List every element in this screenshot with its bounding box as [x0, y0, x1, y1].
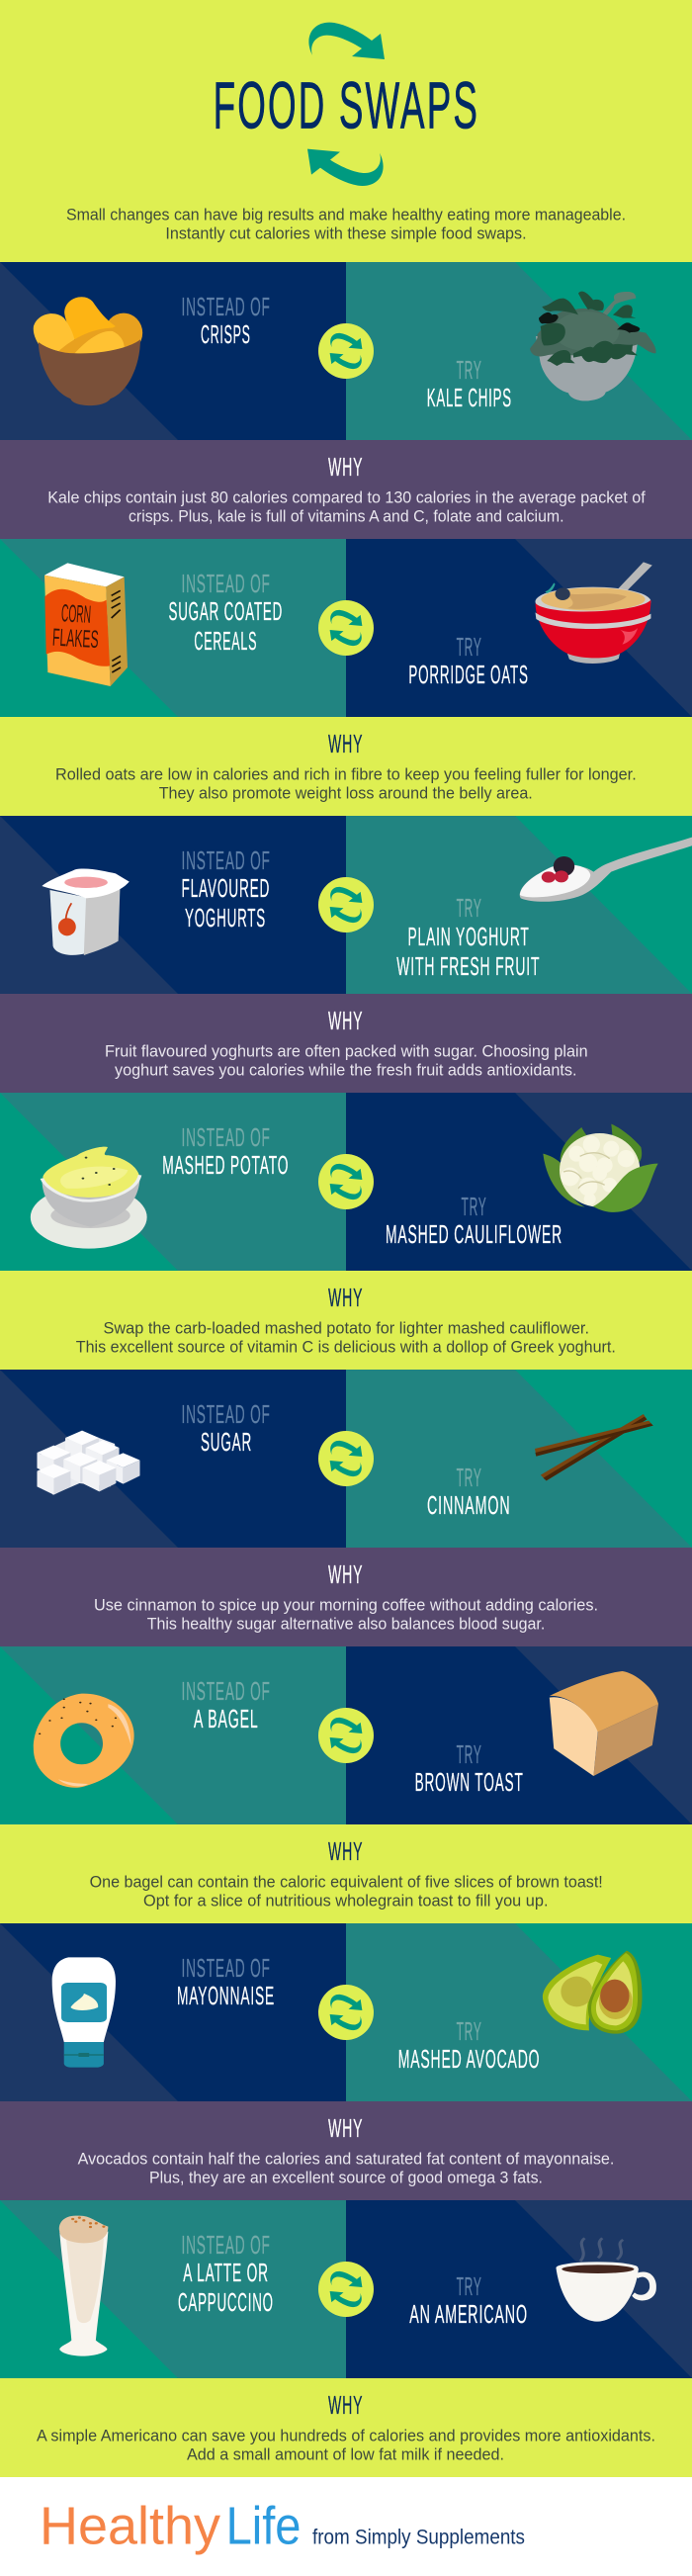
explanation: Rolled oats are low in calories and rich in fibre to keep you feeling fuller for longer. — [55, 765, 637, 783]
panel: swap 5 sugar to cinnamon: TRY — [457, 1463, 482, 1492]
swap badge — [318, 1708, 374, 1763]
panel: swap 4 potato to cauliflower: TRY — [461, 1192, 486, 1221]
explanation: This excellent source of vitamin C is delicious with a dollop of Greek yoghurt. — [76, 1338, 616, 1356]
panel: swap 7 mayonnaise to avocado: TRY — [457, 2016, 482, 2046]
icon: bagel — [34, 1694, 134, 1788]
swap badge — [318, 323, 374, 379]
explanation: yoghurt saves you calories while the fresh fruit adds antioxidants. — [115, 1061, 577, 1079]
explanation: One bagel can contain the caloric equivalent of five slices of brown toast! — [90, 1873, 603, 1891]
icon: spoon with yoghurt and berries — [520, 838, 692, 902]
panel: swap 1 crisps to kale chips: CRISPS — [201, 319, 251, 349]
food name: A BAGEL — [194, 1704, 259, 1733]
panel: why 1 — [0, 440, 692, 539]
icon: flavoured yoghurt pot — [42, 869, 130, 955]
explanation — [47, 489, 646, 525]
explanation — [37, 2427, 655, 2463]
icon: bottom curved arrow — [307, 149, 384, 186]
icon: crisps bowl — [34, 297, 142, 405]
food name: SUGAR — [201, 1427, 252, 1457]
icon: cinnamon sticks — [535, 1414, 653, 1480]
alternative name — [396, 922, 540, 981]
alternative name: MASHED AVOCADO — [398, 2044, 540, 2074]
explanation — [105, 1042, 588, 1079]
swap badge — [318, 877, 374, 933]
explanation: crisps. Plus, kale is full of vitamins A and C, folate and calcium. — [129, 507, 563, 525]
explanation — [90, 1873, 603, 1910]
icon: avocado halves — [543, 1951, 643, 2034]
instead of label: INSTEAD OF — [182, 569, 271, 598]
swap badge — [318, 600, 374, 656]
explanation: Use cinnamon to spice up your morning coffee without adding calories. — [94, 1596, 598, 1614]
alternative name: KALE CHIPS — [427, 383, 512, 412]
explanation: They also promote weight loss around the belly area. — [159, 784, 533, 802]
explanation — [76, 1319, 616, 1356]
panel: swap 8 latte to americano — [0, 2200, 692, 2378]
intro text: Instantly cut calories with these simple food swaps. — [165, 225, 527, 243]
panel: why 3 — [0, 994, 692, 1093]
food name: YOGHURTS — [185, 903, 266, 933]
instead of label: INSTEAD OF — [182, 1122, 271, 1152]
icon: bread loaf — [550, 1671, 658, 1776]
heading: WHY — [328, 1836, 363, 1866]
heading: WHY — [328, 1283, 363, 1312]
icon: top curved arrow — [308, 23, 385, 59]
explanation: Plus, they are an excellent source of good omega 3 fats. — [149, 2169, 543, 2186]
alternative name: WITH FRESH FRUIT — [396, 951, 540, 981]
icon: sugar cubes — [37, 1431, 140, 1495]
food name — [168, 596, 283, 656]
panel: swap 6 bagel to toast: TRY — [457, 1739, 482, 1769]
food name: MASHED POTATO — [162, 1150, 289, 1180]
explanation: Swap the carb-loaded mashed potato for lighter mashed cauliflower. — [103, 1319, 589, 1337]
swap badge — [318, 1431, 374, 1486]
food name — [178, 2258, 274, 2317]
explanation: This healthy sugar alternative also balances blood sugar. — [147, 1615, 545, 1633]
swap badge — [318, 1154, 374, 1209]
icon: cauliflower — [543, 1124, 658, 1212]
panel: swap 1 crisps to kale chips — [0, 262, 692, 440]
alternative name: CINNAMON — [427, 1490, 510, 1520]
explanation — [78, 2150, 614, 2186]
instead of label: INSTEAD OF — [182, 1399, 271, 1429]
header panel — [0, 0, 692, 262]
panel: swap 2 cereals to porridge: TRY — [457, 632, 482, 662]
food name: FLAVOURED — [182, 873, 270, 903]
food name: A LATTE OR — [183, 2258, 269, 2287]
panel: why 2 — [0, 717, 692, 816]
alternative name: AN AMERICANO — [409, 2299, 528, 2329]
panel: swap 1 crisps to kale chips: TRY — [457, 355, 482, 385]
footer brand — [0, 2477, 692, 2576]
explanation: A simple Americano can save you hundreds of calories and provides more antioxidants. — [37, 2427, 655, 2444]
panel: swap 2 cereals to porridge — [0, 539, 692, 717]
explanation: Opt for a slice of nutritious wholegrain toast to fill you up. — [143, 1892, 548, 1910]
explanation: Add a small amount of low fat milk if needed. — [187, 2445, 504, 2463]
heading: WHY — [328, 2113, 363, 2143]
icon: corn flakes box: CORN — [60, 599, 92, 629]
panel: why 8 — [0, 2378, 692, 2477]
food name: SUGAR COATED — [168, 596, 283, 626]
panel: swap 5 sugar to cinnamon — [0, 1370, 692, 1548]
intro text — [66, 207, 626, 243]
food name — [182, 873, 270, 933]
explanation: Avocados contain half the calories and saturated fat content of mayonnaise. — [78, 2150, 614, 2168]
logo Healthy: Healthy — [40, 2497, 220, 2556]
food name: CAPPUCCINO — [178, 2287, 274, 2317]
instead of label: INSTEAD OF — [182, 845, 271, 875]
instead of label: INSTEAD OF — [182, 1676, 271, 1706]
heading: WHY — [328, 1559, 363, 1589]
alternative name: PORRIDGE OATS — [408, 660, 529, 689]
icon: corn flakes box — [44, 563, 128, 686]
instead of label: INSTEAD OF — [182, 2230, 271, 2260]
logo Life: Life — [226, 2497, 301, 2556]
panel: why 6 — [0, 1824, 692, 1923]
panel: swap 3 yoghurts: TRY — [457, 893, 482, 923]
icon: coffee cup — [556, 2238, 656, 2322]
explanation — [94, 1596, 598, 1633]
icon: mayonnaise bottle — [52, 1957, 116, 2068]
icon: latte glass — [59, 2216, 108, 2356]
panel: why 5 — [0, 1548, 692, 1646]
intro text: Small changes can have big results and make healthy eating more manageable. — [66, 207, 626, 224]
explanation: Kale chips contain just 80 calories compared to 130 calories in the average packet of — [47, 489, 646, 506]
heading: WHY — [328, 729, 363, 758]
heading: WHY — [328, 1006, 363, 1035]
tagline: from Simply Supplements — [312, 2527, 525, 2549]
instead of label: INSTEAD OF — [182, 1953, 271, 1983]
panel: swap 6 bagel to toast — [0, 1646, 692, 1824]
food name: MAYONNAISE — [177, 1981, 275, 2010]
instead of label: INSTEAD OF — [182, 292, 271, 321]
explanation: Fruit flavoured yoghurts are often packed with sugar. Choosing plain — [105, 1042, 588, 1060]
icon: kale bowl — [530, 292, 656, 400]
panel: swap 8 latte to americano: TRY — [457, 2271, 482, 2301]
panel: swap 4 potato to cauliflower — [0, 1093, 692, 1271]
alternative name: BROWN TOAST — [415, 1767, 524, 1797]
panel: why 7 — [0, 2101, 692, 2200]
swap badge — [318, 1985, 374, 2040]
food name: CEREALS — [194, 626, 257, 656]
alternative name: PLAIN YOGHURT — [407, 922, 530, 951]
swap badge — [318, 2262, 374, 2317]
panel: swap 7 mayonnaise to avocado — [0, 1923, 692, 2101]
heading: WHY — [328, 452, 363, 482]
icon: corn flakes box: FLAKES — [51, 624, 99, 654]
icon: porridge bowl — [535, 562, 652, 664]
icon: mashed potato bowl — [31, 1147, 147, 1249]
panel: why 4 — [0, 1271, 692, 1370]
explanation — [55, 765, 637, 802]
panel: swap 3 yoghurts — [0, 816, 692, 994]
title: FOOD SWAPS — [214, 68, 479, 142]
heading: WHY — [328, 2390, 363, 2420]
